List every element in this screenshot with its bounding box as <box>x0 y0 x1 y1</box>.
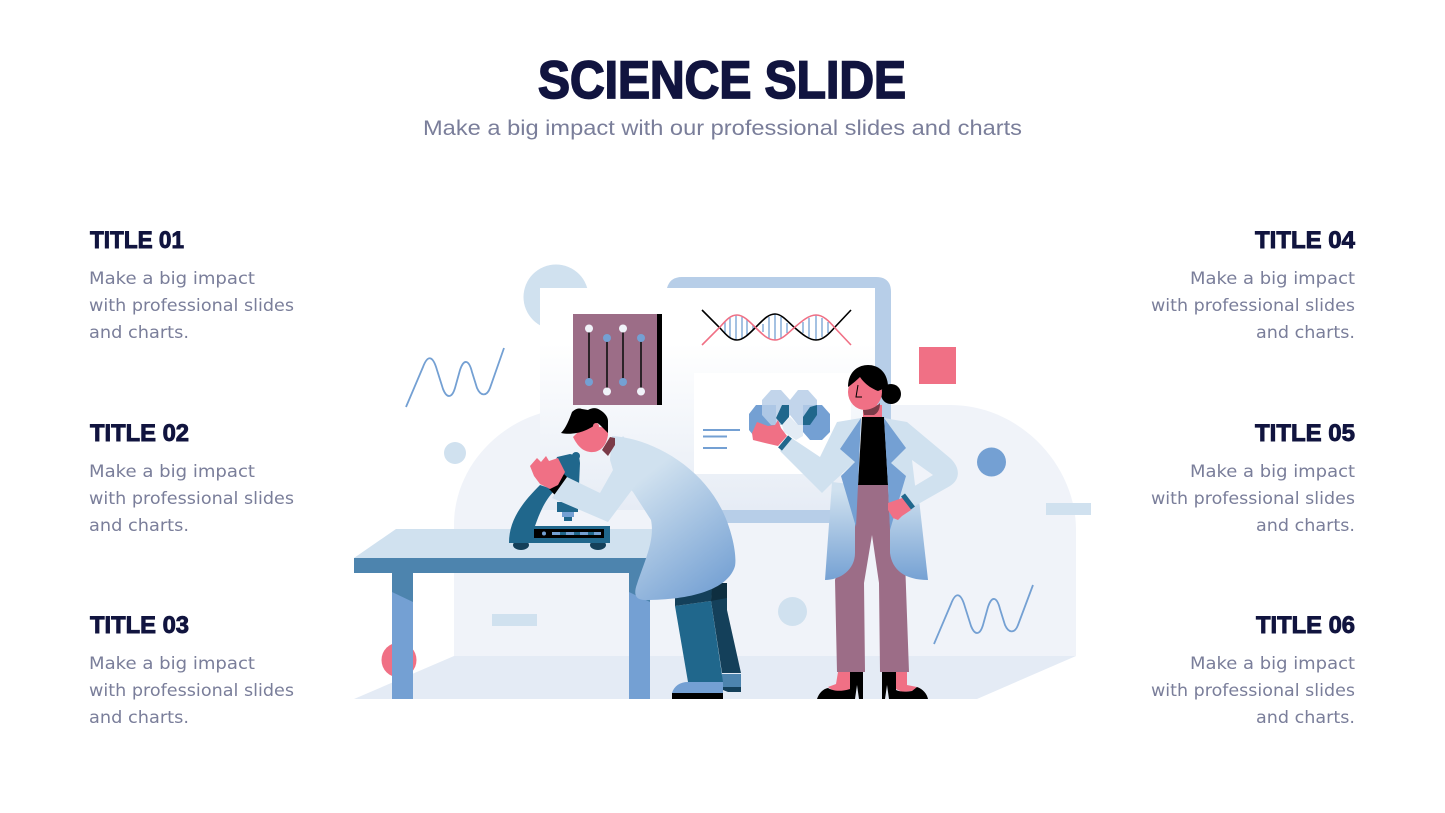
pants <box>835 485 909 672</box>
left text column <box>89 227 294 727</box>
text block: title 04: TITLE 04 <box>1255 227 1356 254</box>
text block: title 03: with professional slides <box>89 681 294 700</box>
text block: title 02 <box>89 420 294 535</box>
text block: title 03: Make a big impact <box>89 654 256 673</box>
text block: title 03: and charts. <box>89 708 189 727</box>
coat lower <box>825 482 928 580</box>
decorative pink square <box>919 347 956 384</box>
left arm and shoulder <box>780 418 861 493</box>
text block: title 01 <box>89 227 294 342</box>
decorative circle left <box>444 442 466 464</box>
text block: title 03: TITLE 03 <box>90 612 189 639</box>
chart lines <box>703 430 740 448</box>
decorative circle top left <box>524 264 588 330</box>
text block: title 02: with professional slides <box>89 489 294 508</box>
coat <box>610 436 735 600</box>
left hand <box>752 420 787 446</box>
text block: title 04: Make a big impact <box>1190 269 1356 288</box>
neck <box>602 437 615 456</box>
microscope <box>509 452 610 550</box>
floor <box>354 656 1076 699</box>
text block: title 06: TITLE 06 <box>1256 612 1355 639</box>
head <box>573 425 608 452</box>
text block: title 05: TITLE 05 <box>1255 420 1355 447</box>
wave line left <box>406 348 504 407</box>
text block: title 02: Make a big impact <box>89 462 256 481</box>
nose line <box>856 385 862 397</box>
text block: title 04: with professional slides <box>1151 296 1355 315</box>
text block: title 02: and charts. <box>89 516 189 535</box>
right text column <box>1151 227 1356 727</box>
decorative circle bottom <box>778 597 807 626</box>
hair <box>848 365 888 391</box>
text block: title 04: and charts. <box>1256 323 1355 342</box>
arm <box>552 436 649 522</box>
text block: title 06 <box>1151 612 1356 727</box>
text block: title 05: and charts. <box>1256 516 1355 535</box>
feet and shoes <box>817 672 928 699</box>
text block: title 02: TITLE 02 <box>90 420 189 447</box>
subtitle: Make a big impact with our professional slides and charts <box>423 116 1022 140</box>
rear shoe <box>722 674 741 687</box>
text block: title 03 <box>89 612 294 727</box>
wave line right <box>934 585 1033 644</box>
sliders panel <box>573 314 662 405</box>
text block: title 01: Make a big impact <box>89 269 256 288</box>
head <box>848 374 882 410</box>
text block: title 05: Make a big impact <box>1190 462 1356 481</box>
front leg <box>675 601 723 682</box>
text block: title 05: with professional slides <box>1151 489 1355 508</box>
lapels <box>840 418 906 530</box>
title: SCIENCE SLIDE <box>538 51 906 110</box>
right cuff <box>903 495 913 508</box>
hand <box>530 456 565 489</box>
smile <box>863 403 880 415</box>
inner white chart panel <box>694 373 851 474</box>
text block: title 05 <box>1151 420 1356 535</box>
hair <box>561 408 608 434</box>
background blob <box>454 405 1076 656</box>
female scientist <box>752 365 958 699</box>
lab screen <box>540 288 875 510</box>
central illustration: scientists in a lab <box>354 264 1091 699</box>
male scientist <box>530 408 741 699</box>
shirt <box>858 417 888 485</box>
molecule octagons <box>749 390 830 440</box>
hair bun <box>881 384 901 404</box>
text block: title 06: with professional slides <box>1151 681 1355 700</box>
text block: title 06: and charts. <box>1256 708 1355 727</box>
decorative bar bottom <box>492 614 537 626</box>
neck <box>863 405 882 425</box>
text block: title 01: TITLE 01 <box>90 227 184 254</box>
lab screen frame <box>667 277 891 523</box>
right hand <box>888 497 911 520</box>
DNA helix <box>702 310 851 345</box>
text block: title 01: with professional slides <box>89 296 294 315</box>
right arm and shoulder <box>884 418 958 507</box>
decorative bar right <box>1046 503 1091 515</box>
text block: title 01: and charts. <box>89 323 189 342</box>
decorative pink circle <box>382 642 416 678</box>
decorative blue circle <box>977 448 1006 476</box>
front shoe <box>672 682 723 693</box>
left cuff <box>780 437 790 449</box>
back leg <box>711 583 741 673</box>
text block: title 06: Make a big impact <box>1190 654 1356 673</box>
text block: title 04 <box>1151 227 1356 342</box>
table <box>354 529 655 699</box>
